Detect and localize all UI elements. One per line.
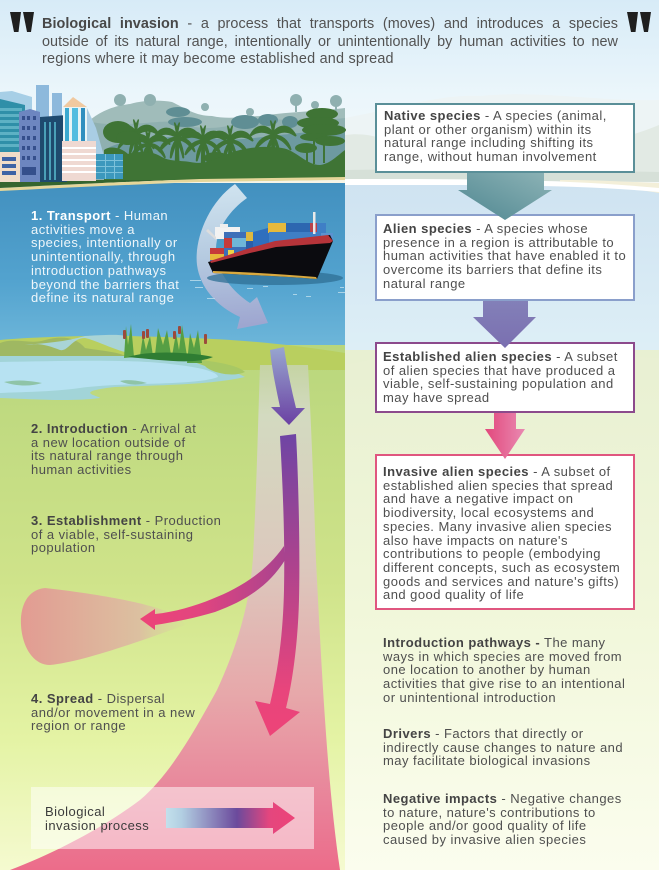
- legend label: invasion process: [45, 818, 149, 833]
- text: step 1 transport: introduction pathways: [31, 263, 166, 278]
- panel: established alien species: may have spread: [383, 390, 490, 405]
- panel: invasive alien species: contributions to people (embodying: [383, 546, 601, 561]
- panel: invasive alien species: also have impacts on nature's: [383, 533, 568, 548]
- heading: biological invasion definition: outside of its natural range, intentionally or unintentionally by human activities to new: [42, 34, 618, 50]
- text: introduction pathways: one location to another by human: [383, 662, 591, 677]
- text: step 3 establishment: 3. Establishment - Production: [31, 513, 221, 528]
- text: step 3 establishment: of a viable, self-sustaining: [31, 527, 193, 542]
- panel: native species: range, without human involvement: [384, 149, 597, 164]
- heading: biological invasion definition: [42, 16, 618, 67]
- text: step 2 introduction: a new location outside of: [31, 435, 186, 450]
- text: step 3 establishment: population: [31, 540, 96, 555]
- text: drivers: indirectly cause changes to nature and: [383, 740, 623, 755]
- panel: invasive alien species: species. Many invasive alien species: [383, 519, 612, 534]
- panel: native species: natural range including shifting its: [384, 135, 594, 150]
- panel: native species: [375, 103, 635, 173]
- panel: alien species: human activities that have enabled it to: [383, 248, 626, 263]
- text: step 2 introduction: human activities: [31, 462, 132, 477]
- panel: invasive alien species: Invasive alien species - A subset of: [383, 464, 611, 479]
- panel: invasive alien species: established alien species that spread: [383, 478, 613, 493]
- heading: biological invasion definition: regions where it may become established and spread: [42, 51, 394, 67]
- panel: established alien species: [375, 342, 635, 413]
- panel: invasive alien species: goods and services and nature's gifts): [383, 574, 619, 589]
- legend arrow: [166, 802, 295, 834]
- panel: established alien species: Established alien species - A subset: [383, 349, 618, 364]
- text: negative impacts: to nature, nature's contributions to: [383, 805, 596, 820]
- text: step 1 transport: define its natural range: [31, 290, 174, 305]
- text: drivers: Drivers - Factors that directly or: [383, 726, 584, 741]
- panel: alien species: [375, 214, 635, 301]
- text: introduction pathways: ways in which species are moved from: [383, 649, 622, 664]
- heading: biological invasion definition: Biological invasion - a process that transports (moves) and introduces a species: [42, 16, 618, 32]
- text: step 4 spread: 4. Spread - Dispersal: [31, 691, 165, 706]
- text: step 2 introduction: 2. Introduction - Arrival at: [31, 421, 196, 436]
- text: step 1 transport: species, intentionally or: [31, 235, 178, 250]
- text: negative impacts: caused by invasive alien species: [383, 832, 586, 847]
- text: negative impacts: Negative impacts - Negative changes: [383, 791, 622, 806]
- panel: invasive alien species: different concepts, such as ecosystem: [383, 560, 620, 575]
- text: step 1 transport: 1. Transport - Human: [31, 208, 168, 223]
- panel: established alien species: of alien species that have produced a: [383, 363, 615, 378]
- panel: native species: plant or other organism) within its: [384, 122, 592, 137]
- text: introduction pathways: [383, 635, 625, 705]
- text: step 2 introduction: its natural range through: [31, 448, 183, 463]
- text: introduction pathways: or unintentional introduction: [383, 690, 556, 705]
- panel: alien species: presence in a region is attributable to: [383, 235, 614, 250]
- text: step 2 introduction: [31, 421, 196, 477]
- text: drivers: [383, 726, 623, 768]
- text: step 4 spread: and/or movement in a new: [31, 705, 195, 720]
- text: step 3 establishment: [31, 513, 221, 555]
- text: negative impacts: people and/or good quality of life: [383, 818, 587, 833]
- text: step 4 spread: [31, 691, 195, 733]
- text: negative impacts: [383, 791, 622, 847]
- text: step 1 transport: activities move a: [31, 222, 135, 237]
- legend label: [45, 804, 149, 833]
- legend label: Biological: [45, 804, 105, 819]
- text: step 4 spread: region or range: [31, 718, 126, 733]
- panel: native species: Native species - A species (animal,: [384, 108, 607, 123]
- text: introduction pathways: activities that give rise to an intentional: [383, 676, 625, 691]
- panel: invasive alien species: and have a negative impact on: [383, 491, 573, 506]
- text: step 1 transport: unintentionally, through: [31, 249, 176, 264]
- panel: invasive alien species: biodiversity, local ecosystems and: [383, 505, 594, 520]
- text: step 1 transport: beyond the barriers that: [31, 277, 179, 292]
- panel: invasive alien species: [375, 454, 635, 610]
- panel: established alien species: viable, self-sustaining population and: [383, 376, 614, 391]
- panel: alien species: Alien species - A species whose: [383, 221, 588, 236]
- panel: invasive alien species: and good quality of life: [383, 587, 524, 602]
- text: step 1 transport: [31, 208, 179, 305]
- text: drivers: may facilitate biological invasions: [383, 753, 591, 768]
- panel: biological invasion process legend: [31, 787, 314, 849]
- text: introduction pathways: Introduction pathways - The many: [383, 635, 606, 650]
- panel: alien species: natural range: [383, 276, 466, 291]
- panel: alien species: overcome its barriers that define its: [383, 262, 602, 277]
